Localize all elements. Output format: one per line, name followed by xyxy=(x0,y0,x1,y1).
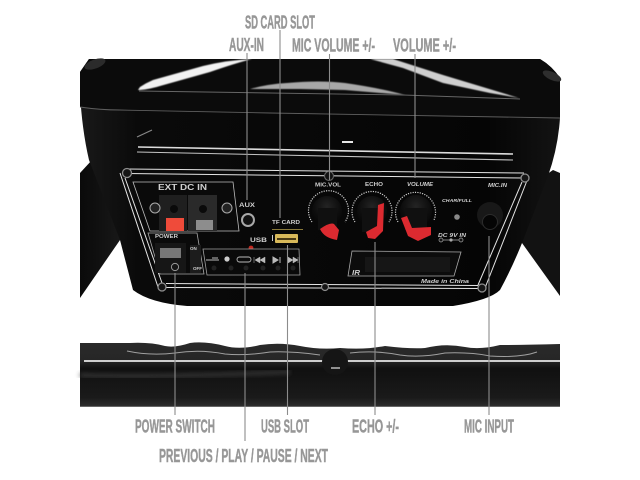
leader lines xyxy=(175,30,489,441)
TF card and USB slot xyxy=(272,220,303,243)
playback buttons xyxy=(203,249,300,275)
power switch box: OFF xyxy=(193,266,202,271)
panel outline xyxy=(120,168,529,292)
IR display window: IR xyxy=(352,270,360,277)
label: echo: ECHO +/- xyxy=(352,416,399,436)
IR display window xyxy=(348,251,461,277)
power switch box: ON xyxy=(190,246,197,251)
speaker body xyxy=(80,59,560,306)
label: mic input: MIC INPUT xyxy=(464,416,514,436)
charge indicator: DC 9V IN xyxy=(438,233,467,239)
charge indicator: CHAR/FULL xyxy=(442,198,472,203)
mic input jack xyxy=(477,183,508,230)
label: USB slot: USB SLOT xyxy=(261,416,309,436)
charge indicator xyxy=(438,198,472,242)
mic volume knob xyxy=(308,182,348,240)
mic input jack: MIC.IN xyxy=(488,183,508,189)
corner hole left xyxy=(83,56,107,72)
label: aux-in: AUX-IN xyxy=(229,35,264,55)
power switch box xyxy=(148,233,204,274)
right leg xyxy=(510,170,560,296)
mic volume knob: MIC.VOL xyxy=(315,182,342,188)
control panel xyxy=(120,168,529,292)
volume knob: VOLUME xyxy=(407,182,433,188)
USB label and LED xyxy=(249,237,267,250)
label: SD card slot: SD CARD SLOT xyxy=(245,12,315,32)
label: power switch: POWER SWITCH xyxy=(135,416,215,436)
AUX jack xyxy=(239,202,256,226)
volume knob xyxy=(396,182,436,241)
TF card and USB slot: TF CARD xyxy=(272,220,300,226)
right top highlight xyxy=(370,59,519,98)
made in China text: Made in China xyxy=(421,279,469,285)
label: previous play pause next: PREVIOUS / PLAY / PAUSE / NEXT xyxy=(159,446,328,466)
USB label and LED: USB xyxy=(250,237,267,244)
lower handle bar xyxy=(80,342,560,407)
AUX jack: AUX xyxy=(239,202,256,209)
top rim band xyxy=(80,59,560,118)
echo knob xyxy=(352,182,392,239)
label: volume: VOLUME +/- xyxy=(393,36,456,56)
corner hole right xyxy=(541,68,563,84)
EXT DC IN terminal block: EXT DC IN xyxy=(158,183,207,192)
echo knob: ECHO xyxy=(365,182,384,188)
speaker photo xyxy=(80,56,563,306)
left top highlight xyxy=(138,59,252,90)
bar centre knob xyxy=(322,349,348,375)
label: mic volume: MIC VOLUME +/- xyxy=(292,36,375,56)
left leg xyxy=(80,160,130,298)
power switch box: POWER xyxy=(155,234,178,240)
EXT DC IN terminal block xyxy=(133,182,239,231)
centre top highlight xyxy=(250,82,405,95)
